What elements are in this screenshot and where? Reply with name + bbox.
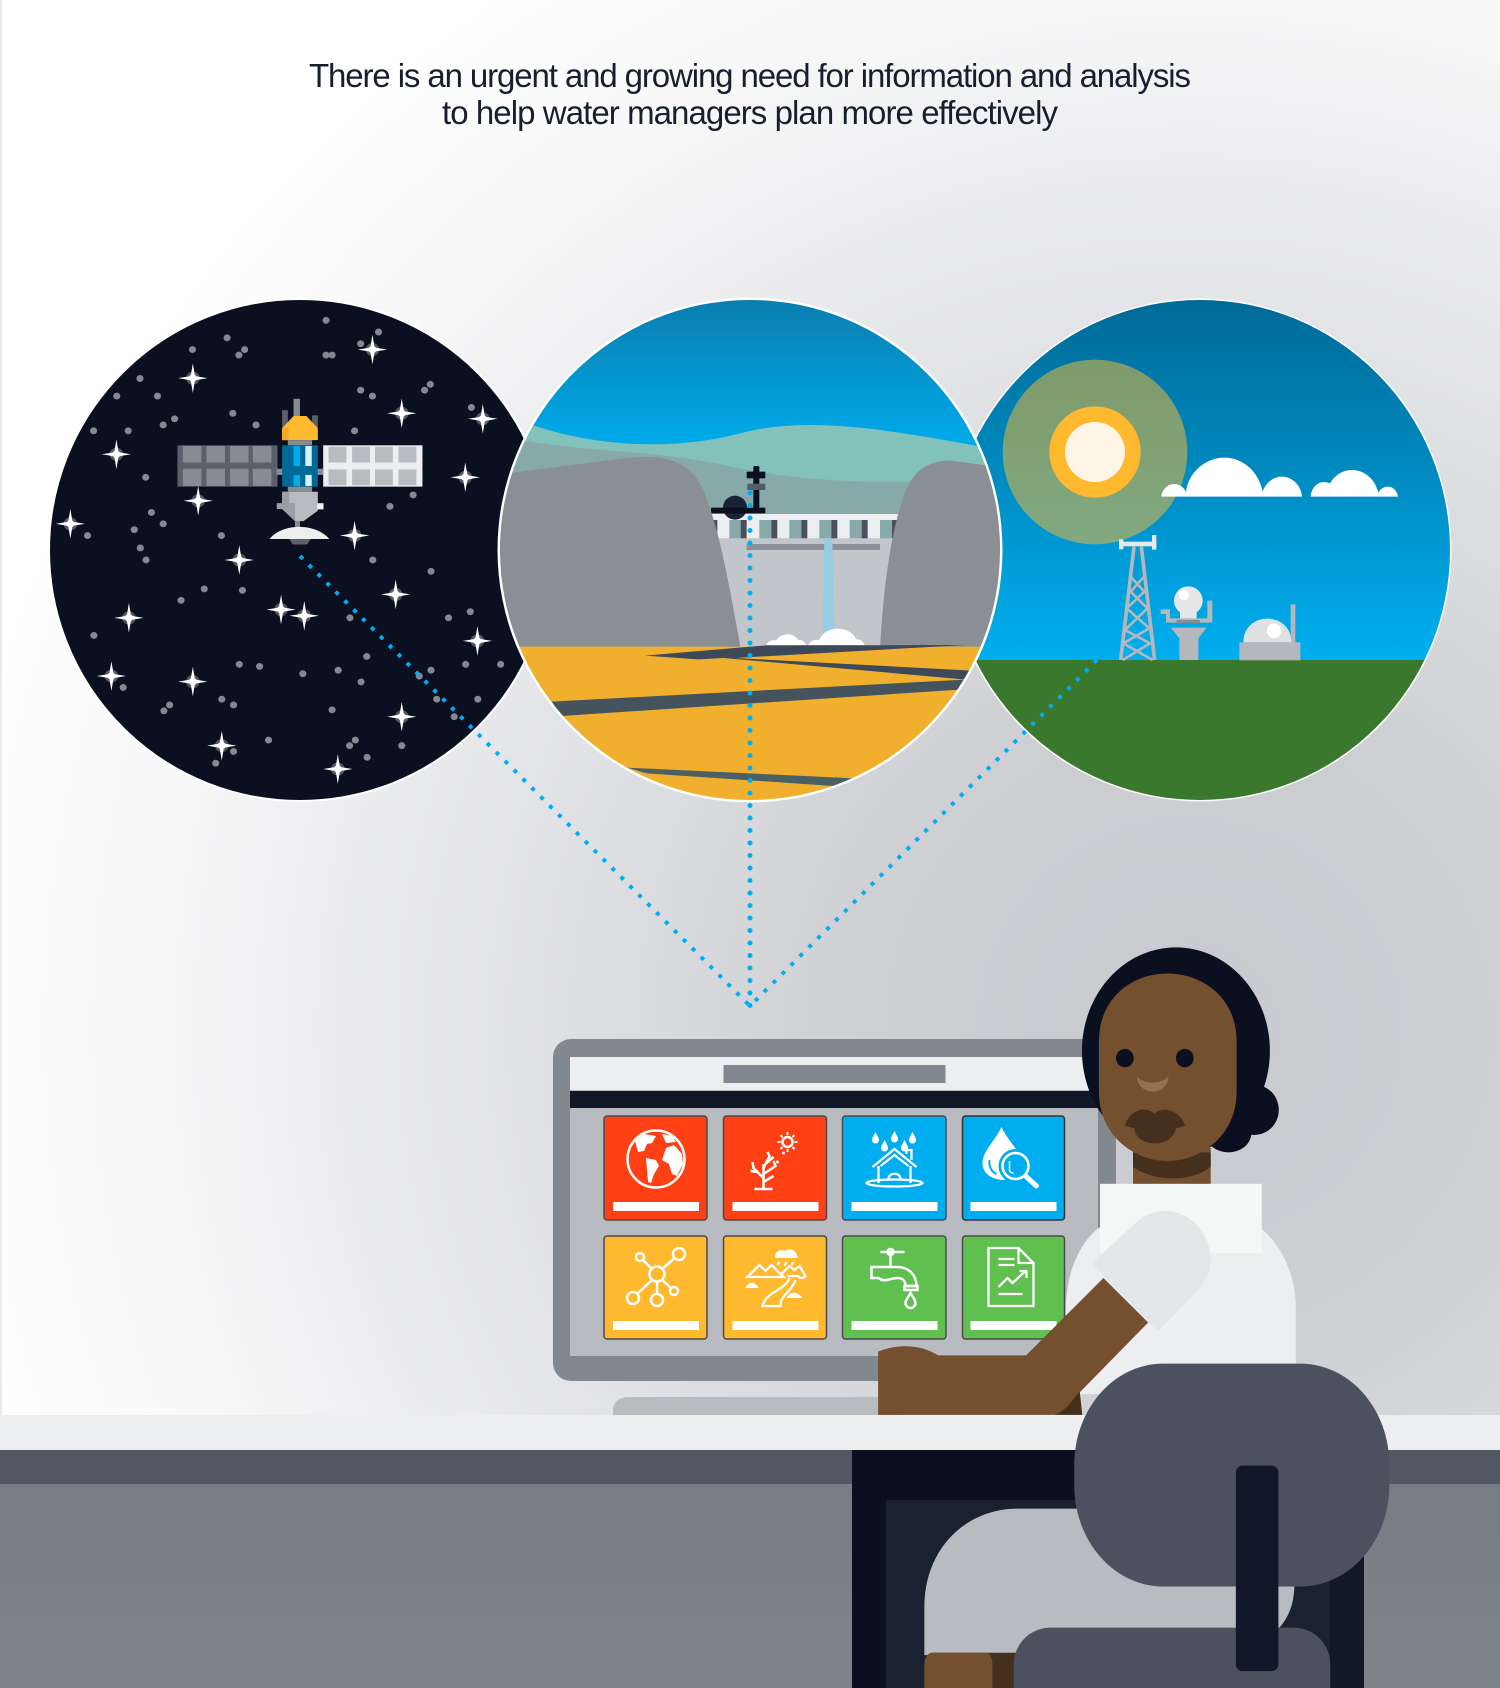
dam wall — [713, 538, 900, 648]
face — [1099, 974, 1237, 1161]
title text: There is an urgent and growing need for information and analysis — [309, 57, 1191, 94]
dotted lines from sources to monitor — [300, 493, 1097, 1006]
monitor — [553, 1039, 1116, 1381]
tile: globe — [604, 1116, 707, 1220]
icon: tower on dam — [711, 466, 765, 520]
chair back — [1074, 1364, 1389, 1586]
desk leg and underside — [852, 1450, 1364, 1688]
icon: satellite — [177, 399, 422, 544]
icon: dome station — [1239, 604, 1300, 660]
panel: middle circle with dam — [487, 297, 1010, 803]
waterfall — [823, 538, 834, 637]
neck — [1133, 1148, 1211, 1191]
sky — [513, 300, 987, 470]
title text: to help water managers plan more effectively — [442, 94, 1058, 131]
icon: sun — [1003, 360, 1187, 544]
ground — [976, 660, 1424, 800]
title text — [309, 57, 1191, 131]
chair stem — [1236, 1466, 1278, 1671]
dam top walkway — [711, 514, 900, 538]
water spray — [767, 629, 865, 645]
bright stars — [56, 335, 497, 784]
tile: tap — [842, 1236, 946, 1339]
river — [552, 645, 972, 786]
desk top — [0, 1415, 1500, 1450]
rock cliffs — [487, 457, 1010, 648]
tile: drought tree — [724, 1116, 826, 1220]
background star dots — [84, 317, 504, 767]
screen — [570, 1057, 1098, 1356]
icon: lattice tower — [1119, 535, 1156, 660]
panel: space circle with satellite — [49, 299, 551, 801]
hair — [1082, 947, 1279, 1154]
chair seat — [1014, 1628, 1330, 1688]
thigh — [924, 1509, 1294, 1655]
tile: landscape — [724, 1236, 826, 1339]
shirt — [1066, 1184, 1296, 1394]
lower legs — [924, 1653, 1018, 1688]
icon: clouds — [1161, 458, 1398, 497]
panel: right circle with weather station — [947, 297, 1460, 803]
arm and hand — [878, 1278, 1148, 1415]
desk front — [0, 1450, 1500, 1688]
sky — [947, 297, 1460, 660]
distant hills — [510, 425, 996, 508]
tile: report document — [962, 1236, 1064, 1339]
icon: radar tower — [1161, 586, 1212, 660]
tile: flooded house — [842, 1116, 946, 1220]
tile: network — [604, 1236, 707, 1339]
figure: woman at desk — [878, 947, 1389, 1688]
tile: water drop magnifier — [962, 1116, 1064, 1220]
golden ground — [520, 646, 980, 800]
monitor stand — [613, 1397, 900, 1415]
